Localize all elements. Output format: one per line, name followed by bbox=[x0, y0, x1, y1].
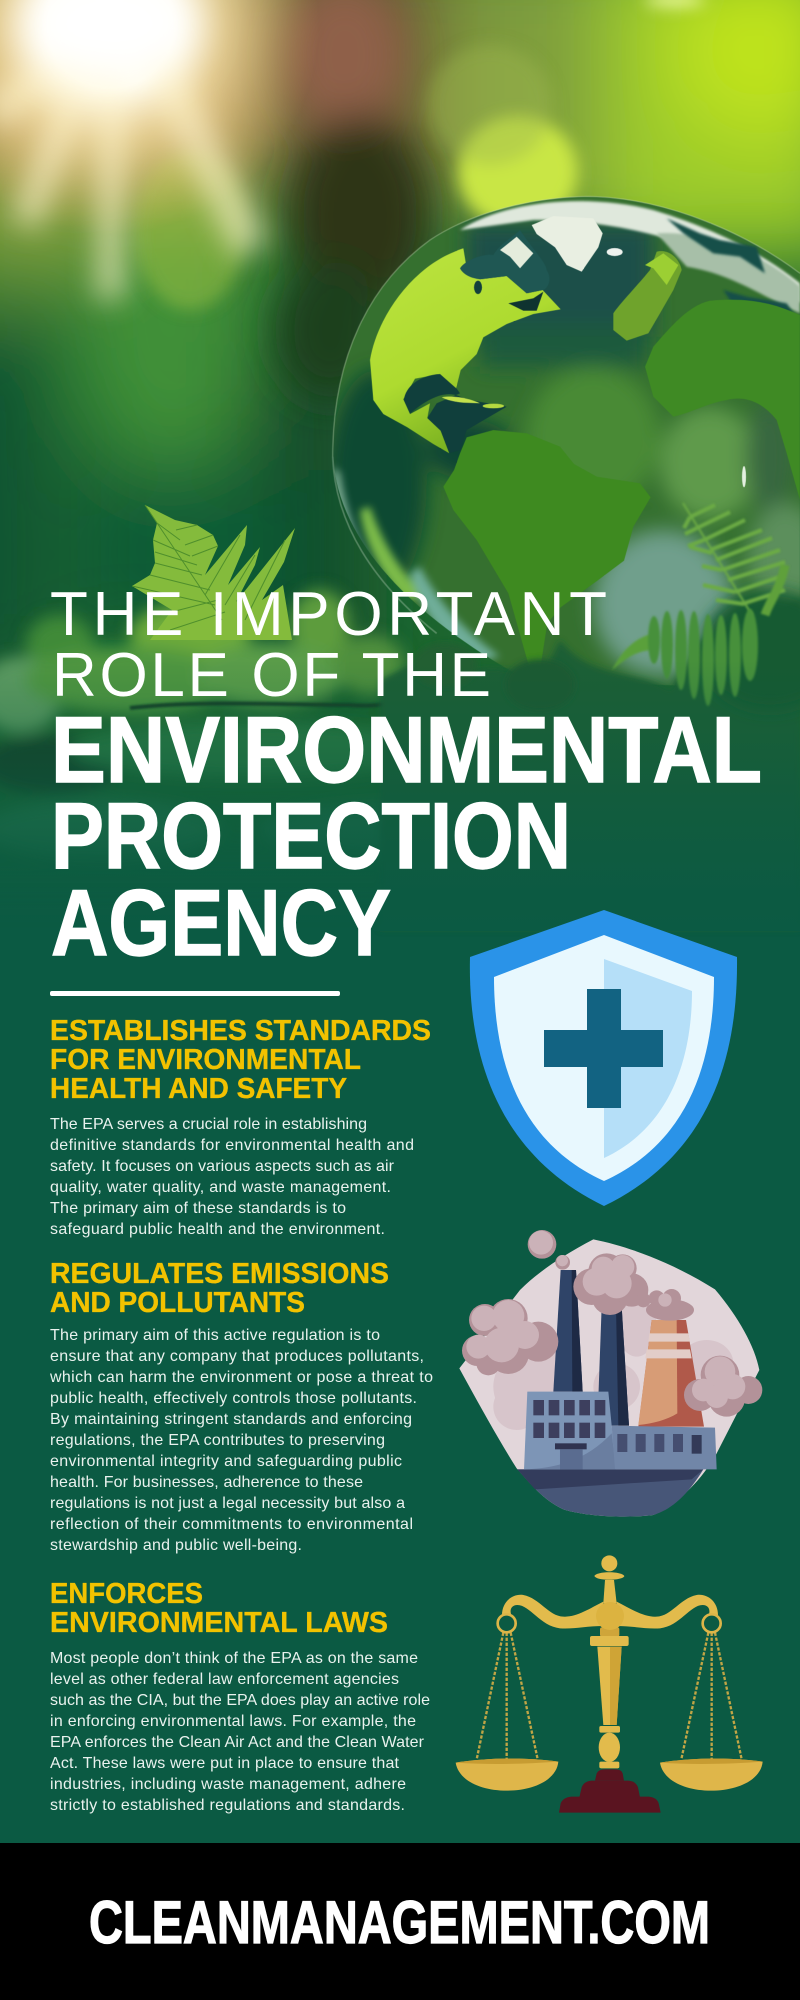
section 1 body text: quality, water quality, and waste management. bbox=[50, 1179, 391, 1196]
factory ground bbox=[517, 1469, 703, 1517]
base bbox=[559, 1769, 661, 1813]
section 2 body text: which can harm the environment or pose a threat to bbox=[49, 1369, 433, 1386]
hero photo background bbox=[0, 0, 800, 930]
fern: left foreground bbox=[132, 505, 295, 640]
greenland bbox=[532, 216, 603, 272]
south america bbox=[443, 430, 651, 670]
section 3 body text bbox=[50, 1650, 430, 1814]
section 3 heading: ENFORCES bbox=[50, 1578, 203, 1610]
section 2 heading: AND POLLUTANTS bbox=[50, 1287, 305, 1319]
section 3 body text: EPA enforces the Clean Air Act and the Clean Water bbox=[50, 1734, 425, 1751]
title: PROTECTION bbox=[51, 783, 571, 888]
title: THE IMPORTANT bbox=[50, 580, 607, 649]
section 3 body text: Act. These laws were put in place to ensure that bbox=[50, 1755, 400, 1772]
section 2 body text: ensure that any company that produces pollutants, bbox=[50, 1348, 424, 1365]
section 2 body text: regulations, the EPA contributes to preserving bbox=[50, 1432, 385, 1449]
section 2 body text: health. For businesses, adherence to these bbox=[50, 1474, 363, 1491]
dark continents north bbox=[666, 217, 794, 312]
sun glow and rays bbox=[0, 0, 400, 300]
factory backdrop blob bbox=[459, 1239, 759, 1517]
section 1 heading: FOR ENVIRONMENTAL bbox=[50, 1044, 361, 1076]
fade to solid green bbox=[0, 660, 800, 931]
section 3 body text: level as other federal law enforcement agencies bbox=[50, 1671, 399, 1688]
section 3 heading: ENVIRONMENTAL LAWS bbox=[50, 1607, 388, 1639]
africa bbox=[645, 300, 800, 500]
footer band bbox=[0, 1843, 800, 2000]
branch bbox=[130, 702, 420, 708]
icon: shield with cross bbox=[470, 910, 737, 1206]
fern: upper right bbox=[683, 503, 785, 615]
gulf and caribbean water bbox=[404, 374, 507, 453]
section 3 body text: such as the CIA, but the EPA does play an active role bbox=[50, 1692, 430, 1709]
section 1 heading: HEALTH AND SAFETY bbox=[50, 1073, 347, 1105]
pans bbox=[456, 1759, 763, 1791]
europe bbox=[613, 251, 682, 341]
section 1 body text: definitive standards for environmental health and bbox=[50, 1137, 414, 1154]
section 3 body text: strictly to established regulations and standards. bbox=[50, 1797, 405, 1814]
section 1 body text: The primary aim of these standards is to bbox=[50, 1200, 346, 1217]
section 3 heading bbox=[50, 1578, 388, 1639]
section 1 body text: safeguard public health and the environment. bbox=[50, 1221, 385, 1238]
top silver reflection bbox=[460, 201, 800, 303]
section 2 body text: The primary aim of this active regulation is to bbox=[50, 1327, 380, 1344]
section 2 body text: public health, effectively controls those pollutants. bbox=[50, 1390, 417, 1407]
title: AGENCY bbox=[51, 870, 391, 975]
section 1 heading bbox=[50, 1015, 431, 1105]
section 2 body text: regulations is not just a legal necessity but also a bbox=[50, 1495, 405, 1512]
section 2 body text: environmental integrity and safeguarding public bbox=[50, 1453, 402, 1470]
globe glass body bbox=[320, 190, 800, 690]
divider rule bbox=[50, 991, 340, 996]
title: ROLE OF THE bbox=[52, 641, 491, 710]
north america bbox=[370, 248, 561, 453]
glass reflections bbox=[333, 467, 500, 663]
central column bbox=[590, 1555, 629, 1768]
foliage: right dark treeline bbox=[380, 590, 800, 930]
section 2 body text: reflection of their commitments to environmental bbox=[50, 1516, 413, 1533]
section 1 heading: ESTABLISHES STANDARDS bbox=[50, 1015, 431, 1047]
section 3 body text: in enforcing environmental laws. For example, the bbox=[50, 1713, 416, 1730]
section 2 body text: By maintaining stringent standards and enforcing bbox=[50, 1411, 412, 1428]
chains bbox=[477, 1633, 742, 1768]
hudson bay bbox=[460, 230, 549, 293]
title bbox=[50, 580, 762, 975]
smoke puffs bbox=[462, 1230, 762, 1417]
smokestacks bbox=[553, 1270, 583, 1392]
globe rim bbox=[333, 197, 800, 457]
cooling tower bbox=[638, 1320, 704, 1427]
icon: factory with smoke bbox=[459, 1230, 762, 1517]
factory buildings bbox=[524, 1392, 616, 1469]
section 1 body text bbox=[50, 1116, 414, 1238]
rings bbox=[498, 1614, 516, 1632]
glass globe bbox=[320, 190, 800, 690]
section 1 body text: The EPA serves a crucial role in establishing bbox=[50, 1116, 367, 1133]
section 3 body text: industries, including waste management, adhere bbox=[50, 1776, 406, 1793]
section 1 body text: safety. It focuses on various aspects such as air bbox=[50, 1158, 395, 1175]
icon: balance scales bbox=[456, 1555, 763, 1813]
foliage: left ground bbox=[0, 590, 580, 860]
section 2 body text: stewardship and public well-being. bbox=[50, 1537, 302, 1554]
section 2 body text bbox=[49, 1327, 433, 1554]
fern: lower right fan bbox=[612, 609, 758, 706]
section 3 body text: Most people don’t think of the EPA as on the same bbox=[50, 1650, 418, 1667]
section 2 heading bbox=[50, 1258, 389, 1319]
beam bbox=[502, 1595, 718, 1629]
section 2 heading: REGULATES EMISSIONS bbox=[50, 1258, 389, 1290]
